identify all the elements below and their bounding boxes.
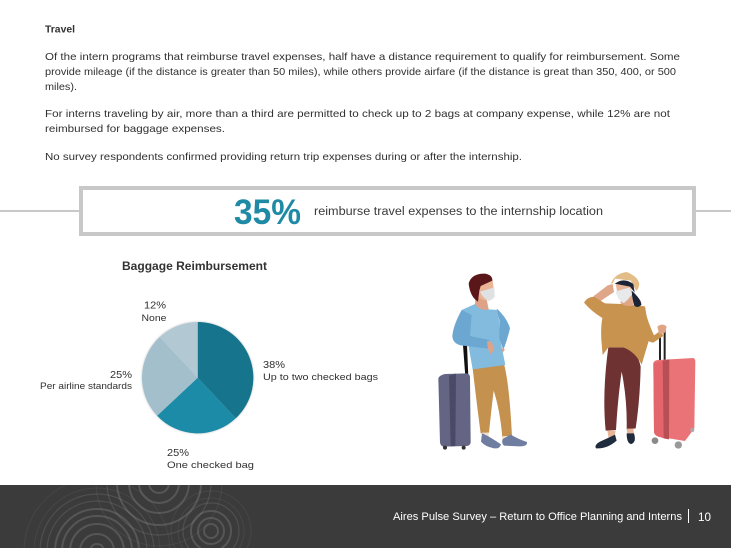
pie chart: baggage reimbursement xyxy=(142,322,253,433)
label: 38% up to two checked bags: Up to two checked bags xyxy=(263,372,378,383)
callout: 35% reimburse travel expenses xyxy=(81,188,694,234)
paragraph: distance requirement: provide mileage (if the distance is greater than 50 miles), while others provide airfare (if the distance is great than 350, 400, or 500 xyxy=(45,66,676,78)
slice: 25% airline xyxy=(142,337,198,416)
callout text: reimburse travel expenses to the internship location xyxy=(314,206,603,218)
arm: right hand on suitcase xyxy=(639,307,663,343)
label: 25% per airline standards: 25% xyxy=(110,369,132,381)
head xyxy=(616,282,632,303)
slice: 38% xyxy=(198,322,253,418)
page number: 10 xyxy=(698,510,711,524)
hat xyxy=(611,272,639,291)
suitcase: grey xyxy=(438,345,471,450)
paragraph: return trip: No survey respondents confirmed providing return trip expenses during or after the internship. xyxy=(45,151,522,163)
label: 12% None xyxy=(142,300,166,324)
label: 38% up to two checked bags xyxy=(263,359,378,383)
label: 25% per airline standards xyxy=(40,369,132,392)
shoes xyxy=(481,433,527,448)
footer title: Aires Pulse Survey – Return to Office Planning and Interns xyxy=(393,511,683,523)
hands xyxy=(487,341,505,354)
label: 12% None: None xyxy=(142,313,166,324)
illustration: man with suitcase xyxy=(438,274,527,450)
mask xyxy=(616,287,632,303)
neck xyxy=(475,295,489,310)
arms xyxy=(452,308,510,350)
heading: Travel: Travel xyxy=(45,24,75,36)
label: 12% None: 12% xyxy=(144,300,166,312)
callout number: 35% xyxy=(234,193,301,232)
torso xyxy=(462,304,505,369)
head xyxy=(477,281,495,301)
ponytail xyxy=(632,291,641,307)
paragraph: distance requirement: miles). xyxy=(45,81,77,93)
slice: 12% xyxy=(160,322,198,378)
illustration: woman with suitcase xyxy=(584,272,695,449)
paragraph: baggage: For interns traveling by air, more than a third are permitted to check up to 2 bags at company expense, while 12% are not xyxy=(45,108,670,120)
decorative rings xyxy=(24,485,252,548)
paragraph: distance requirement xyxy=(45,51,680,93)
text block: travel xyxy=(45,24,680,163)
slice: 25% one bag xyxy=(157,378,236,433)
hair xyxy=(469,274,492,302)
label: 38% up to two checked bags: 38% xyxy=(263,359,285,371)
mask xyxy=(480,287,495,301)
footer band xyxy=(0,485,731,548)
chart heading: Baggage Reimbursement xyxy=(122,259,267,273)
torso xyxy=(584,297,650,365)
paragraph: baggage xyxy=(45,108,670,135)
legs: trousers xyxy=(604,347,641,431)
suitcase: red xyxy=(652,329,695,449)
label: 25% one checked bag: One checked bag xyxy=(167,460,254,471)
legs xyxy=(473,364,512,437)
raised arm: forearm xyxy=(593,284,614,301)
label: 25% one checked bag: 25% xyxy=(167,447,189,459)
label: 25% one checked bag xyxy=(167,447,254,471)
label: 25% per airline standards: Per airline standards xyxy=(40,381,132,392)
shoes xyxy=(595,433,635,448)
neck xyxy=(621,295,633,306)
paragraph: baggage: reimbursed for baggage expenses. xyxy=(45,123,225,135)
paragraph: distance requirement: Of the intern programs that reimburse travel expenses, half have a distance requirement to qualify for reimbursement. Some xyxy=(45,51,680,63)
